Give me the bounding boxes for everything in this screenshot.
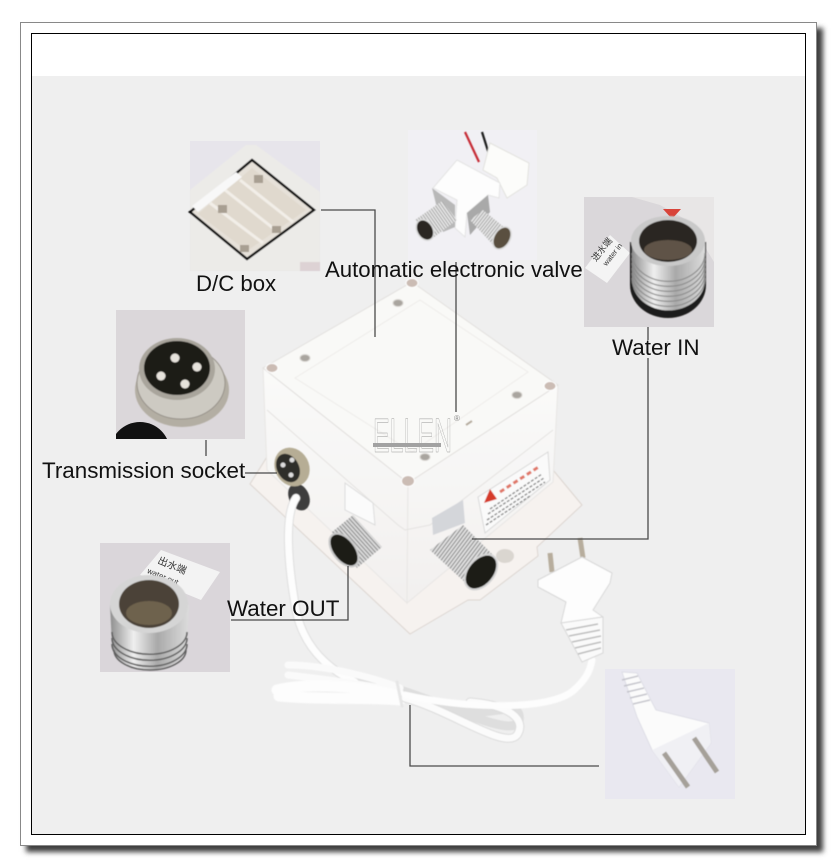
photo: power plug: [605, 669, 735, 799]
plug prongs: [550, 538, 583, 572]
socket face: [144, 341, 210, 395]
threaded pipe: [630, 242, 706, 318]
pipe opening: [119, 580, 179, 628]
warning label: [478, 452, 550, 533]
leader: D/C box: [321, 210, 375, 337]
photo: water out connector: [100, 543, 230, 672]
prongs: [664, 738, 717, 787]
outlet tag: [345, 483, 375, 525]
photo: automatic electronic valve: [408, 130, 537, 260]
brand watermark: ELLEN: [373, 410, 452, 463]
socket pins: [280, 458, 294, 478]
photo background: [100, 543, 230, 672]
leader: electronic valve: [455, 262, 457, 412]
cable tie: [397, 682, 402, 706]
main control box: [250, 278, 582, 634]
black corner object: [116, 422, 167, 439]
leader: transmission socket: [205, 440, 207, 456]
water in tag text: [589, 233, 624, 270]
photo background: [190, 141, 320, 271]
photo: water in connector: [584, 197, 714, 327]
warning sticker: [632, 197, 714, 262]
socket ring: [268, 441, 316, 493]
warning triangle: [484, 489, 497, 503]
product diagram: [42, 131, 720, 790]
screws: [300, 300, 522, 460]
photo background: [116, 310, 245, 439]
label: D/C box: D/C box: [196, 271, 276, 296]
status LED slit: [466, 421, 472, 425]
leader: power plug: [410, 705, 599, 766]
upper loop of bundle: [288, 665, 400, 692]
photo: transmission socket: [116, 310, 245, 439]
pipe opening: [639, 220, 697, 262]
battery dividers: [210, 180, 293, 243]
right opening: [489, 224, 515, 252]
battery contacts: [218, 175, 281, 252]
brand watermark: [373, 410, 460, 463]
right face: [407, 385, 558, 603]
threaded pipe: [110, 605, 189, 669]
water in tag text: water in: [600, 241, 624, 268]
leader: water out: [231, 566, 348, 620]
threaded collar: [137, 347, 225, 419]
photo background: [408, 130, 537, 260]
pipe rim: [631, 216, 705, 266]
black grommet: [284, 480, 314, 514]
white lid strip: [192, 172, 242, 212]
seal gasket: [190, 160, 314, 259]
tail to plug: [405, 660, 592, 706]
top face: [263, 282, 558, 483]
water in tag: [585, 235, 630, 283]
threads: [632, 253, 705, 306]
pins: [156, 354, 202, 388]
thread: [332, 515, 382, 568]
label: automatic electronic valve: Automatic electronic valve: [325, 257, 583, 282]
socket rim: [139, 338, 215, 400]
opening: [458, 548, 504, 596]
registered mark: ®: [454, 414, 460, 423]
plug head: [538, 557, 612, 623]
label: transmission socket: Transmission socket: [42, 458, 246, 483]
grip ridges: [622, 676, 650, 704]
plug face shading: [652, 723, 711, 787]
power cable: [277, 498, 592, 738]
lower loop of bundle: [277, 686, 400, 700]
flange: [135, 353, 229, 427]
left thread: [415, 201, 457, 238]
water out tag text: 出水端: [156, 554, 189, 577]
watermark bar: [373, 443, 441, 447]
right mounting flange: [467, 195, 490, 235]
plug body: [622, 672, 711, 787]
warning heading: [500, 466, 540, 492]
solenoid head: [483, 143, 529, 198]
left mounting flange: [432, 188, 455, 232]
pipe rim: [110, 575, 188, 633]
left face: [263, 368, 408, 603]
photo background: [605, 669, 735, 799]
label corner: [300, 262, 320, 271]
leader: water in: [647, 327, 649, 340]
base plate: [250, 452, 582, 634]
socket face: [271, 450, 305, 486]
threads: [112, 632, 187, 670]
label: water out: Water OUT: [227, 596, 340, 621]
battery compartment: [198, 168, 306, 251]
black wire: [482, 132, 495, 173]
hanging loop: [405, 698, 520, 738]
power plug: [538, 538, 612, 662]
leader lines: [206, 210, 648, 766]
photo background: [584, 197, 714, 327]
mounting boss near inlet: [496, 549, 514, 563]
transmission socket on the box: [268, 441, 316, 514]
left opening: [413, 216, 437, 244]
thread: [430, 525, 495, 587]
water out tag text: water out: [145, 566, 180, 587]
box body: [190, 145, 320, 271]
photo: D/C battery box: [190, 141, 320, 271]
water out pipe on the box: [324, 515, 382, 572]
warning text lines: [486, 474, 545, 525]
water out tag: [140, 550, 220, 600]
red triangle: [663, 209, 681, 219]
red wire: [465, 132, 479, 162]
cable shadow: [288, 498, 519, 726]
corner holes: [266, 278, 556, 486]
water in pipe on the box: [430, 525, 504, 596]
valve body: [433, 160, 500, 237]
water out tag text: [145, 551, 189, 588]
opening: [324, 528, 364, 572]
right thread: [470, 210, 510, 247]
inlet tag: [432, 500, 465, 535]
lid outline: [295, 300, 528, 452]
seam between lid and body: [267, 410, 553, 530]
strain relief: [561, 617, 603, 662]
water in tag text: 进水端: [589, 235, 614, 263]
label: water in: Water IN: [612, 335, 700, 360]
cable from box to bundle: [288, 498, 355, 682]
